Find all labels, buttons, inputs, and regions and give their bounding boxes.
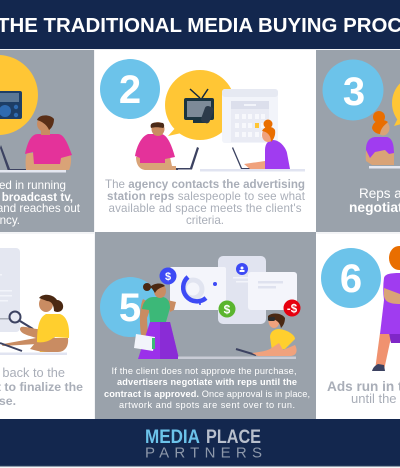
woman standing: [372, 246, 400, 371]
number badge 2: 2: [119, 68, 141, 112]
icon: person badge: [236, 263, 248, 275]
panel 3: [316, 50, 400, 232]
text: station reps salespeople to see what: [107, 190, 305, 203]
header band: [0, 0, 400, 49]
logo: [145, 426, 262, 462]
man at laptop: [135, 122, 199, 170]
text: artwork and spots are sent over to run.: [119, 400, 295, 410]
person at laptop: [0, 115, 72, 172]
logo: PARTNERS: [145, 444, 262, 462]
icon: green dollar badge: [218, 300, 236, 318]
icon: dollar badge: [160, 268, 176, 284]
text: contract is approved. Once approval is in place,: [104, 389, 310, 399]
icon: green dollar badge: $: [224, 302, 231, 316]
logo: MEDIA: [145, 426, 200, 448]
woman at desk: [366, 111, 400, 168]
text: available ad space meets the client's: [108, 202, 302, 215]
center card: [218, 256, 266, 324]
panel 2: [95, 50, 316, 234]
text: criteria.: [186, 214, 224, 227]
panel 6: [316, 234, 400, 419]
woman with tablet: [0, 295, 69, 355]
text: advertisers negotiate with reps until the: [117, 377, 297, 387]
speech bubble: [392, 75, 400, 131]
man with tablet: [178, 314, 297, 359]
text: The agency contacts the advertising: [105, 178, 305, 191]
woman at laptop: [200, 120, 305, 172]
calendar card: [222, 89, 278, 143]
chart card: [170, 267, 226, 310]
icon: radio: [0, 91, 22, 119]
icon: dollar badge: $: [165, 271, 171, 283]
number badge 5: [100, 277, 160, 337]
right card: [248, 272, 297, 310]
panel 5: [95, 234, 316, 419]
icon: tv: [184, 89, 214, 124]
logo: PLACE: [206, 426, 261, 448]
footer band: [0, 419, 400, 466]
number badge 3: [322, 60, 384, 120]
icon: red minus dollar badge: -$: [287, 304, 298, 316]
text: If the client does not approve the purchase,: [112, 366, 296, 376]
number badge 6: 6: [340, 257, 362, 301]
speech bubble with tv: [165, 70, 235, 140]
number badge 2: [100, 59, 160, 119]
panel 4: [0, 234, 94, 419]
icon: magnifier: [10, 312, 33, 329]
document: [0, 248, 20, 332]
icon: red minus dollar badge: [284, 300, 300, 316]
speech bubble with radio: [0, 55, 38, 135]
number badge 6: [321, 248, 381, 308]
woman presenting: [134, 283, 179, 359]
number badge 3: 3: [343, 70, 365, 114]
panel 1: [0, 50, 94, 232]
number badge 5: 5: [119, 286, 141, 330]
